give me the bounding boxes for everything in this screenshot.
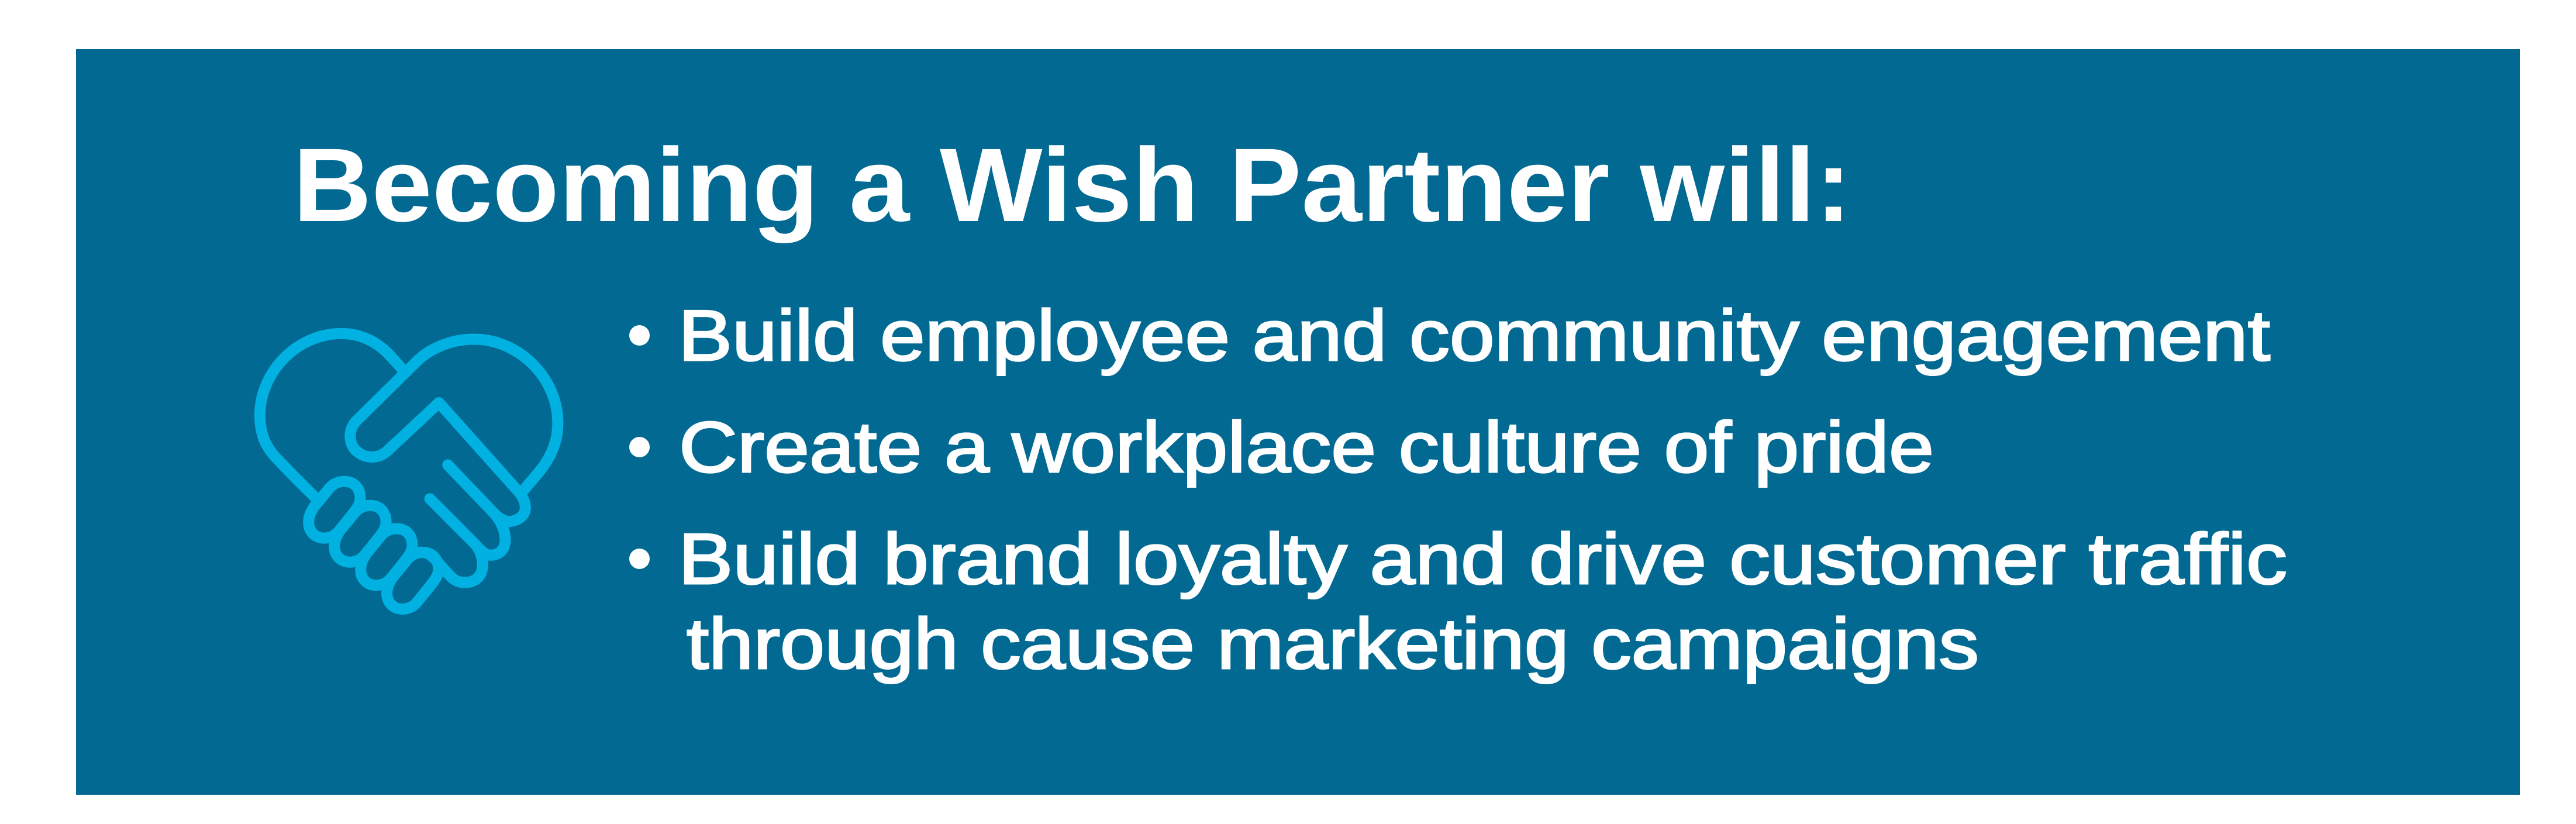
icon: heart-shaped handshake (260, 333, 558, 609)
title: Becoming a Wish Partner will: (293, 126, 1851, 243)
bullet item: brand loyalty and cause marketing: through cause marketing campaigns (687, 604, 1979, 684)
bullet item: brand loyalty and cause marketing: Build brand loyalty and drive customer traffic (678, 519, 2287, 599)
bullet item: brand loyalty and cause marketing (629, 519, 2287, 684)
bullet item: employee and community engagement: Build employee and community engagement (678, 296, 2270, 376)
bullet item: workplace culture of pride: Create a workplace culture of pride (679, 408, 1934, 488)
